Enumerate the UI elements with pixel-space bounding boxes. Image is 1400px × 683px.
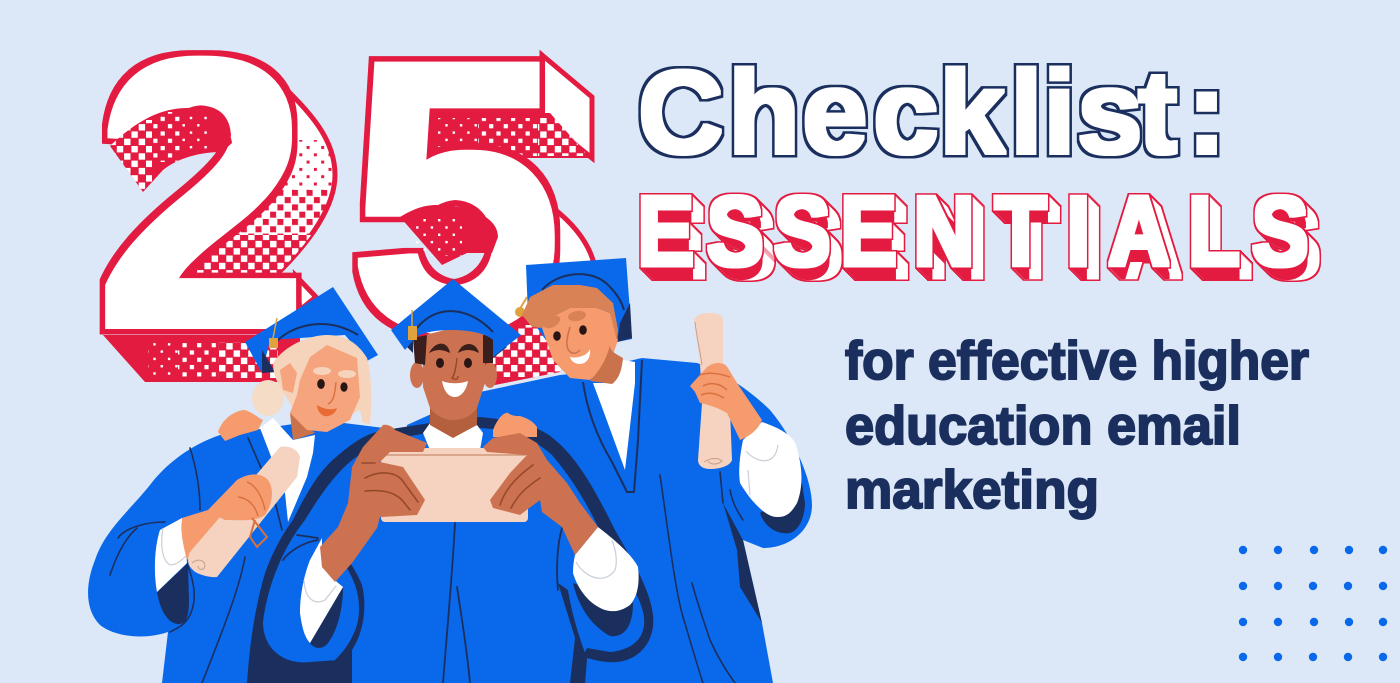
neck and collar — [423, 423, 483, 450]
sleeves — [310, 587, 343, 648]
hand on shoulder — [218, 410, 263, 441]
subtitle: marketing — [845, 460, 1099, 520]
scroll and hand — [694, 313, 732, 469]
digit 2 extrusion — [103, 73, 340, 382]
scroll — [188, 447, 300, 577]
cap back — [403, 333, 507, 358]
hand from right graduate — [493, 413, 537, 437]
face — [423, 328, 485, 420]
digit 5 extrusion — [420, 55, 597, 385]
decorative dot grid — [1239, 546, 1387, 661]
subtitle: for effective higher — [845, 331, 1309, 391]
heading: Essentials: ESSENTIALS — [638, 177, 1308, 286]
subtitle — [845, 331, 1309, 520]
illustration: three graduates — [88, 258, 812, 683]
graduate: middle — [247, 279, 653, 683]
cap — [391, 279, 521, 357]
graduate: right — [400, 258, 812, 683]
heading: Checklist: Checklist: — [638, 47, 1226, 179]
subtitle: education email — [845, 396, 1241, 456]
digit 2 inner shading — [110, 108, 232, 195]
digit 5 inner shading — [400, 205, 498, 265]
face — [542, 308, 618, 380]
tablet — [381, 448, 528, 522]
big number 25 — [100, 50, 596, 385]
hands — [320, 425, 427, 582]
ears — [410, 362, 424, 388]
hair and face — [252, 380, 284, 416]
graduate: left — [88, 287, 400, 683]
